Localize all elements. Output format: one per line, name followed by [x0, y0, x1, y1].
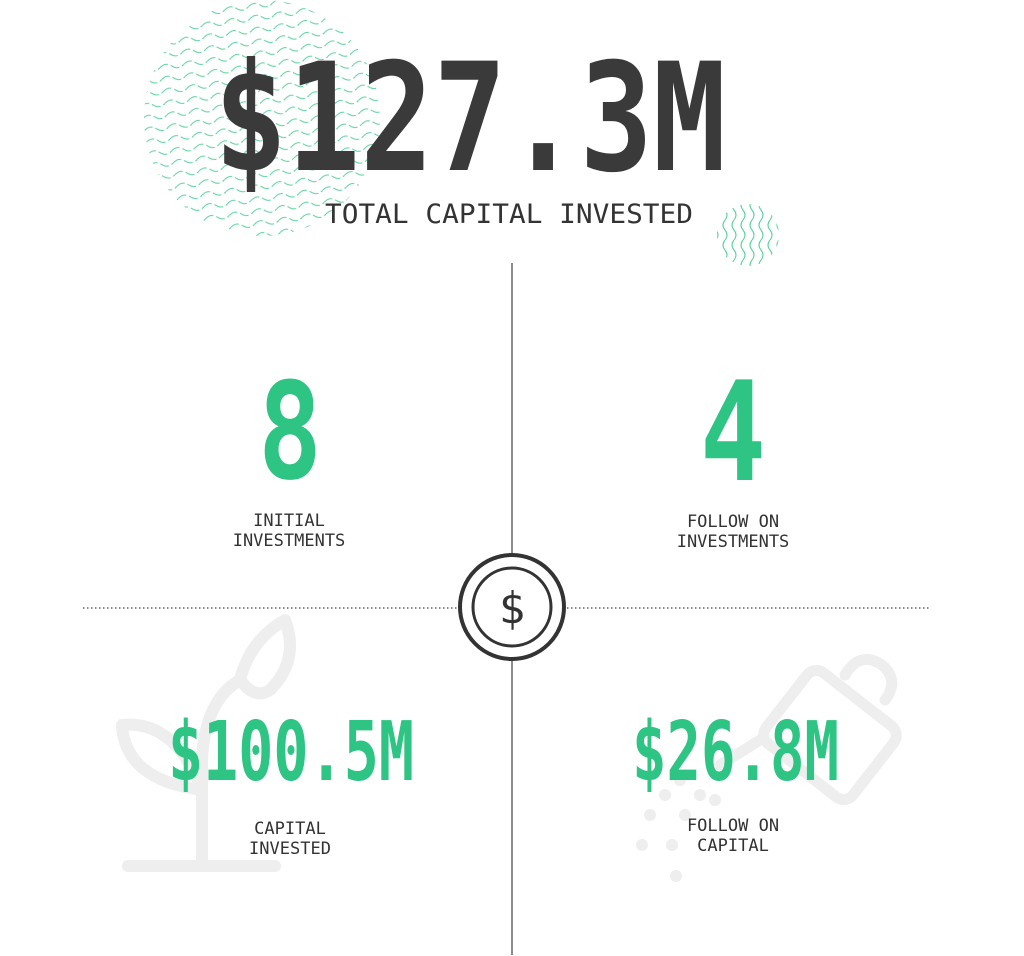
- icon: coin: [460, 555, 564, 659]
- icon: plant: [122, 620, 290, 866]
- panel: follow on investments: FOLLOW ON: [687, 512, 779, 532]
- divider vertical: [511, 263, 513, 955]
- panel: follow on capital: [632, 705, 839, 856]
- panel: initial investments: [233, 354, 345, 551]
- panel: follow on capital: CAPITAL: [697, 836, 769, 856]
- title: total value: $127.3M: [214, 32, 726, 206]
- panel: capital invested: INVESTED: [249, 839, 331, 859]
- decoration: big wave circle: [144, 0, 380, 236]
- panel: follow on investments: INVESTMENTS: [677, 532, 789, 552]
- panel: initial investments: INVESTMENTS: [233, 531, 345, 551]
- panel: capital invested: [168, 705, 414, 859]
- panel: initial investments: 8: [258, 354, 322, 510]
- decoration: small wave circle: [717, 204, 779, 266]
- panel: follow on capital: FOLLOW ON: [687, 816, 779, 836]
- divider horizontal dotted: [83, 607, 930, 609]
- panel: initial investments: INITIAL: [253, 511, 325, 531]
- panel: follow on investments: 4: [700, 352, 766, 513]
- panel: follow on investments: [677, 352, 789, 552]
- panel: follow on capital: $26.8M: [632, 705, 839, 800]
- icon: coin: $: [499, 583, 525, 634]
- subtitle: TOTAL CAPITAL INVESTED: [325, 199, 693, 230]
- panel: capital invested: CAPITAL: [254, 819, 326, 839]
- panel: capital invested: $100.5M: [168, 705, 414, 800]
- icon: watering can: [636, 659, 901, 882]
